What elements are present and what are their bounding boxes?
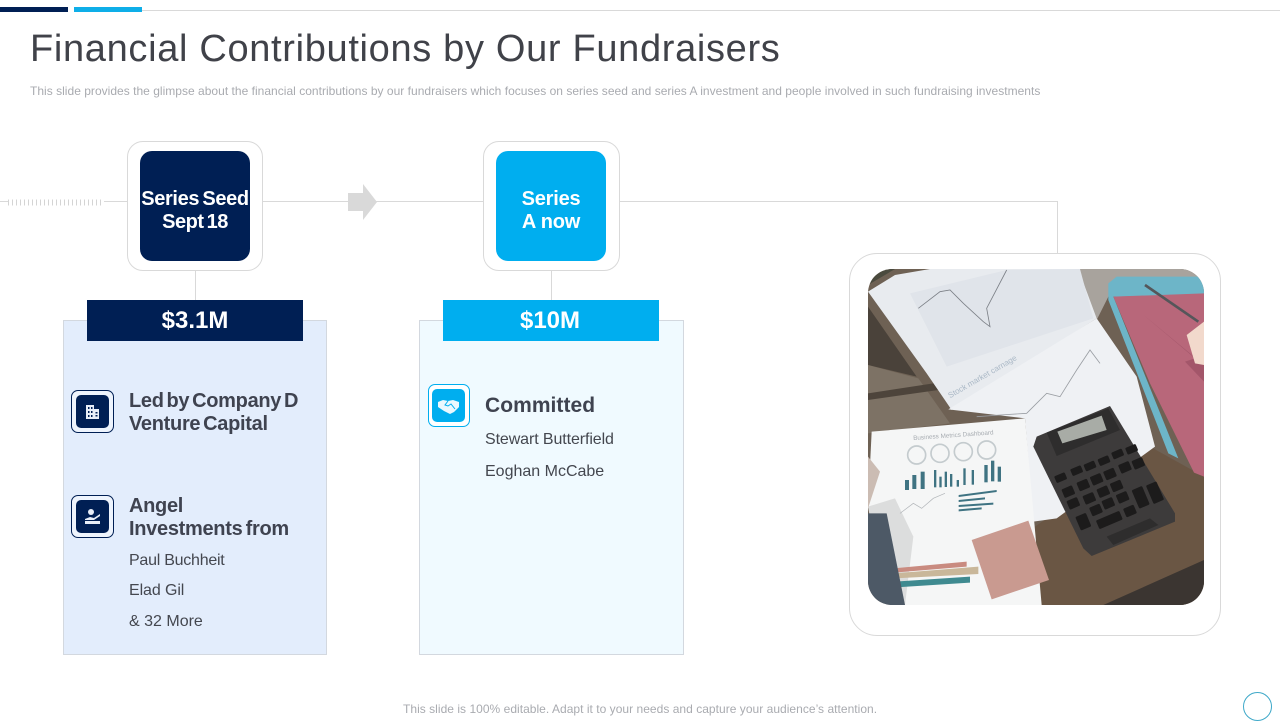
footer note: This slide is 100% editable. Adapt it to your needs and capture your audience’s attention. bbox=[403, 702, 877, 716]
panel: series seed: & 32 More bbox=[129, 613, 203, 630]
calculator bbox=[1033, 406, 1175, 556]
subtitle: This slide provides the glimpse about the financial contributions by our fundraisers which focuses on series seed and series A investment and people involved in such fundraising investments bbox=[30, 84, 1040, 98]
icon: handshake bbox=[428, 384, 470, 427]
heading: angel investments: Investments from bbox=[129, 518, 289, 540]
stage label: series A: A now bbox=[522, 211, 580, 233]
amount: 10M: $10M bbox=[520, 307, 580, 334]
stage label: series seed: Series Seed bbox=[141, 188, 249, 210]
stage: series A bbox=[483, 141, 620, 271]
connector: series A to panel bbox=[551, 271, 552, 300]
panel: series seed bbox=[63, 320, 327, 655]
panel: series A: Stewart Butterfield bbox=[485, 431, 614, 448]
panel: series A bbox=[419, 320, 684, 655]
panel: series seed: Paul Buchheit bbox=[129, 552, 224, 569]
amount: 10M bbox=[443, 300, 659, 341]
timeline connector bbox=[0, 184, 1058, 253]
arrow bbox=[348, 184, 377, 220]
amount: 3.1M bbox=[87, 300, 303, 341]
committed names bbox=[485, 431, 614, 480]
top accent bars bbox=[0, 7, 1280, 12]
heading: angel investments bbox=[129, 495, 289, 540]
photo: financial papers and calculator: Stock market carnage bbox=[947, 353, 1019, 400]
stage label: series A bbox=[496, 151, 606, 261]
icon: company building bbox=[71, 390, 114, 433]
photo frame bbox=[849, 253, 1221, 636]
heading: committed: Committed bbox=[485, 394, 595, 417]
investor names bbox=[129, 552, 225, 630]
stage: series seed bbox=[127, 141, 263, 271]
heading: angel investments: Angel bbox=[129, 495, 183, 517]
help circle bbox=[1243, 692, 1272, 721]
amount: 3.1M: $3.1M bbox=[162, 307, 228, 334]
heading: led by bbox=[129, 390, 298, 435]
heading: led by: Venture Capital bbox=[129, 413, 268, 435]
icon: angel investment bbox=[71, 495, 114, 538]
heading: led by: Led by Company D bbox=[129, 390, 298, 412]
title: Financial Contributions by Our Fundraisers bbox=[30, 28, 780, 70]
panel: series A: Eoghan McCabe bbox=[485, 463, 604, 480]
stage label: series seed: Sept 18 bbox=[162, 211, 228, 233]
photo: financial papers and calculator bbox=[868, 269, 1204, 605]
stage label: series seed bbox=[140, 151, 250, 261]
connector: seed to panel bbox=[195, 271, 196, 300]
panel: series seed: Elad Gil bbox=[129, 582, 184, 599]
photo: financial papers and calculator: Business Metrics Dashboard bbox=[913, 429, 994, 442]
stage label: series A: Series bbox=[522, 188, 580, 210]
